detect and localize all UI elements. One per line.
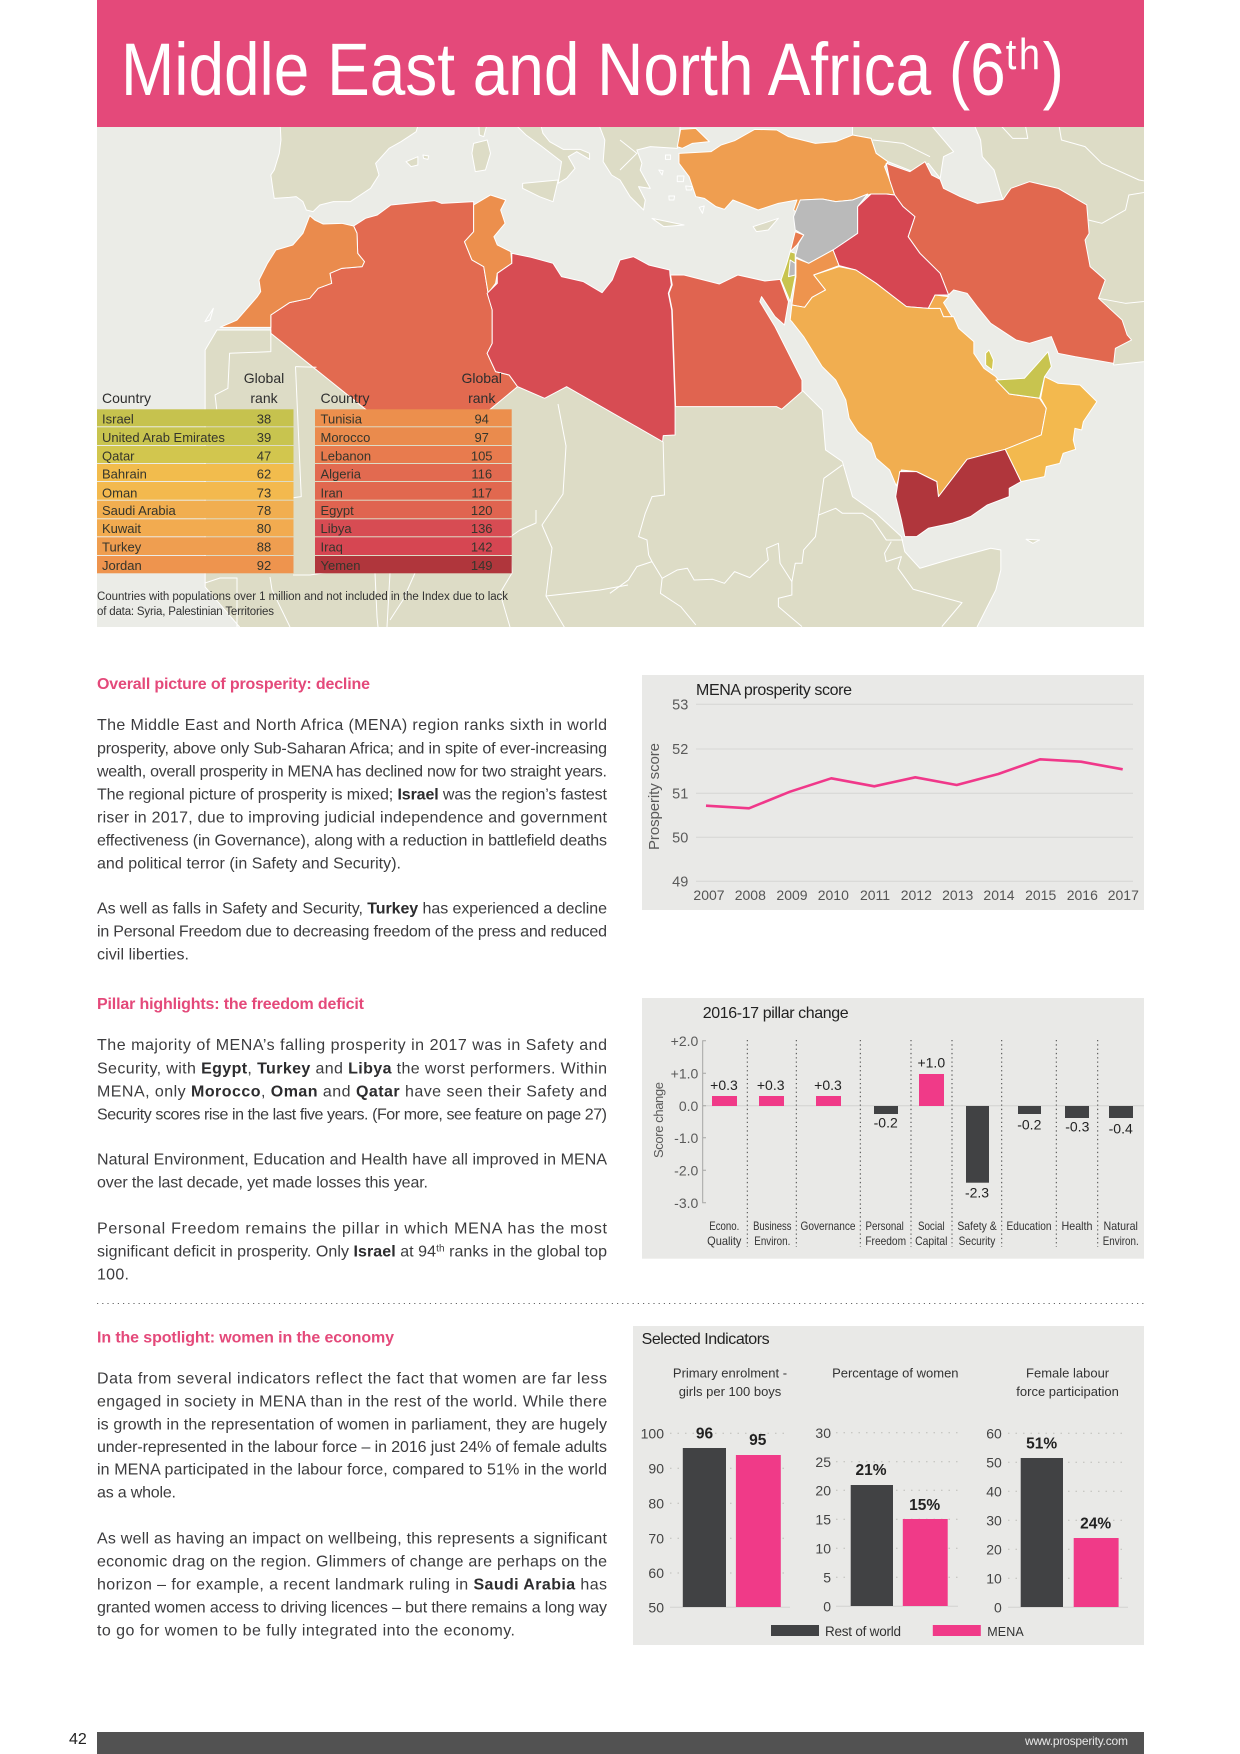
- chart: percentage of women: 0: [823, 1598, 831, 1614]
- table: countries ranked 94 to 149: Morocco: [320, 430, 370, 445]
- category labels: Health: [1062, 1219, 1092, 1233]
- axis title: Score change: [651, 1082, 666, 1158]
- axis labels: -1.0: [674, 1130, 699, 1146]
- category labels: Quality: [707, 1234, 741, 1248]
- chart: percentage of women: 10: [815, 1540, 831, 1556]
- country: Oman: [1005, 377, 1097, 482]
- country: Kuwait: [928, 295, 952, 317]
- text block: pillar highlights: ranks in the global top: [445, 1243, 607, 1260]
- country: Tunisia: [465, 195, 512, 293]
- text block: pillar highlights: The majority of MENA’s falling prosperity in 2017 was in Safety and: [97, 1037, 607, 1054]
- chart: female labour force participation: 60: [986, 1426, 1002, 1442]
- table: countries ranked 94 to 149: [315, 370, 512, 573]
- text block: overall picture: [96, 717, 608, 963]
- western map group: Iberia, Italy, Maghreb: [205, 120, 590, 413]
- table: countries ranked 38 to 92: Global: [244, 370, 284, 386]
- table: countries ranked 38 to 92: 88: [257, 540, 271, 555]
- text block: overall picture: The Middle East and North Africa (MENA) region ranks sixth in world: [97, 717, 607, 734]
- x axis years: 2009: [776, 887, 808, 903]
- footer bar: www.prosperity.com: [1024, 1734, 1128, 1748]
- x axis years: 2014: [983, 887, 1015, 903]
- land: Africa: [205, 330, 1001, 653]
- axis labels: -3.0: [674, 1195, 699, 1211]
- x axis years: 2008: [735, 887, 766, 903]
- y axis labels: 49: [672, 874, 688, 890]
- Palestinian Territories: [788, 260, 795, 277]
- chart: percentage of women: Percentage of women: [832, 1365, 959, 1380]
- chart: female labour force participation: [986, 1365, 1128, 1616]
- x axis years: 2012: [901, 887, 932, 903]
- table: countries ranked 94 to 149: 142: [471, 540, 493, 555]
- axis labels: 0.0: [679, 1098, 699, 1114]
- table: countries ranked 38 to 92: Bahrain: [102, 466, 147, 481]
- text block: overall picture: As well as falls in Safety and Security, Turkey has experienced a decline: [97, 900, 607, 917]
- heading: overall picture: Overall picture of prosperity: decline: [97, 676, 370, 693]
- map footnote: Countries with populations over 1 million and not included in the Index due to lack: [97, 591, 508, 603]
- chart: female labour force participation: 0: [994, 1600, 1002, 1616]
- category labels: Safety &: [957, 1219, 997, 1233]
- text block: pillar highlights: Security scores rise in the last five years. (For more, see feature on page 27): [97, 1106, 607, 1123]
- category labels: Governance: [800, 1219, 856, 1233]
- table: countries ranked 94 to 149: Tunisia: [320, 411, 363, 426]
- y axis labels: 52: [672, 742, 688, 758]
- text block: pillar highlights: Natural Environment, Education and Health have all improved in MENA: [97, 1151, 607, 1168]
- table: countries ranked 94 to 149: 116: [471, 466, 492, 481]
- text block: pillar highlights: over the last decade, yet made losses this year.: [97, 1174, 428, 1191]
- panel title: Selected Indicators: [642, 1331, 770, 1348]
- chart title: 2016-17 pillar change: [703, 1005, 849, 1022]
- y axis labels: [672, 698, 688, 890]
- table: countries ranked 38 to 92: Israel: [102, 411, 134, 426]
- country: Israel: [781, 252, 795, 302]
- land: Balkans and Caucasus: [600, 127, 680, 210]
- bar values: +0.3: [710, 1077, 738, 1093]
- eastern map group: land, Middle East countries: [597, 120, 1159, 627]
- text block: spotlight: granted women access to driving licences – but there remains a long way: [97, 1599, 607, 1616]
- land borders: [610, 120, 1159, 627]
- text block: overall picture: and political terror (in Safety and Security).: [97, 855, 401, 872]
- country: Libya: [487, 253, 675, 442]
- country: Turkey: [679, 129, 895, 213]
- chart: female labour force participation: 10: [986, 1570, 1002, 1586]
- text block: overall picture: prosperity, above only Sub-Saharan Africa; and in spite of ever-increasing: [97, 740, 607, 757]
- chart: female labour force participation: 24%: [1080, 1515, 1111, 1532]
- title banner: [97, 0, 1144, 127]
- panel: MENA prosperity score line chart: [642, 675, 1144, 910]
- category labels: Capital: [915, 1234, 947, 1248]
- title banner: ): [1043, 28, 1064, 111]
- chart: primary enrolment: 70: [648, 1530, 664, 1546]
- x axis years: 2010: [818, 887, 849, 903]
- table: countries ranked 38 to 92: Saudi Arabia: [102, 503, 176, 518]
- table: countries ranked 38 to 92: 38: [257, 411, 271, 426]
- table: countries ranked 38 to 92: Oman: [102, 485, 137, 500]
- chart: primary enrolment: 60: [648, 1565, 664, 1581]
- chart: percentage of women: 5: [823, 1570, 831, 1586]
- chart: primary enrolment: 90: [648, 1460, 664, 1476]
- bar values: +0.3: [814, 1077, 842, 1093]
- text block: overall picture: effectiveness (in Governance), along with a reduction in battlefield deaths: [97, 832, 607, 849]
- category labels: Personal: [866, 1219, 904, 1233]
- bar values: -0.2: [1017, 1116, 1042, 1132]
- chart: percentage of women: 20: [815, 1482, 831, 1498]
- table: countries ranked 38 to 92: 92: [257, 558, 271, 573]
- text block: overall picture: wealth, overall prosperity in MENA has declined now for two straight years.: [96, 763, 607, 780]
- text block: spotlight: horizon – for example, a recent landmark ruling in Saudi Arabia has: [97, 1576, 607, 1593]
- bar values: -2.3: [965, 1184, 989, 1200]
- text block: spotlight: economic drag on the region. Glimmers of change are perhaps on the: [97, 1553, 607, 1570]
- category labels: Environ.: [754, 1234, 790, 1248]
- map footnote: [97, 591, 508, 618]
- country: Saudi Arabia: [790, 267, 1046, 497]
- category labels: Environ.: [1103, 1234, 1139, 1248]
- y axis labels: 53: [672, 698, 688, 714]
- chart: female labour force participation: force participation: [1016, 1384, 1119, 1399]
- category labels: Security: [959, 1234, 995, 1248]
- text block: spotlight: under-represented in the labour force – in 2016 just 24% of female adults: [97, 1439, 607, 1456]
- table: countries ranked 94 to 149: 149: [471, 558, 493, 573]
- axis labels: +1.0: [671, 1066, 699, 1082]
- table: countries ranked 94 to 149: Iran: [320, 485, 343, 500]
- x axis years: 2017: [1108, 887, 1139, 903]
- text block: overall picture: in Personal Freedom due to decreasing freedom of the press and reduced: [97, 923, 607, 940]
- text block: spotlight: [97, 1370, 608, 1639]
- footer bar: [97, 1732, 1144, 1754]
- chart: female labour force participation: Female labour: [1026, 1365, 1110, 1380]
- x axis years: 2011: [860, 887, 890, 903]
- text block: pillar highlights: significant deficit in prosperity. Only Israel at 94: [97, 1243, 436, 1260]
- panel: selected indicators: [633, 1326, 1144, 1645]
- table: countries ranked 38 to 92: 62: [257, 466, 271, 481]
- table: countries ranked 38 to 92: Country: [102, 390, 151, 406]
- legend: Rest of world: [825, 1624, 901, 1639]
- legend: MENA: [987, 1625, 1024, 1639]
- chart: female labour force participation: 51%: [1026, 1435, 1057, 1452]
- text block: spotlight: to go for women to be fully integrated into the economy.: [97, 1622, 515, 1639]
- chart title: MENA prosperity score: [696, 682, 852, 699]
- table: countries ranked 38 to 92: 80: [257, 521, 271, 536]
- country: UAE: [996, 352, 1051, 398]
- chart: primary enrolment: 95: [749, 1432, 767, 1449]
- chart: primary enrolment: 50: [648, 1600, 664, 1616]
- chart: female labour force participation: 50: [986, 1454, 1002, 1470]
- table: countries ranked 94 to 149: Yemen: [320, 558, 360, 573]
- table: countries ranked 94 to 149: 120: [471, 503, 493, 518]
- category labels: Education: [1006, 1219, 1052, 1233]
- chart: female labour force participation: 20: [986, 1542, 1002, 1558]
- map footnote: of data: Syria, Palestinian Territories: [97, 606, 274, 618]
- table: countries ranked 94 to 149: Egypt: [320, 503, 354, 518]
- heading: pillar highlights: Pillar highlights: the freedom deficit: [97, 996, 365, 1013]
- chart: female labour force participation: 40: [986, 1484, 1002, 1500]
- text block: overall picture: civil liberties.: [97, 946, 189, 963]
- table: countries ranked 38 to 92: United Arab Emirates: [102, 430, 225, 445]
- category labels: [707, 1219, 1139, 1248]
- chart: percentage of women: 25: [815, 1454, 831, 1470]
- table: countries ranked 94 to 149: Country: [320, 390, 370, 406]
- heading: spotlight: In the spotlight: women in the economy: [97, 1329, 394, 1346]
- table: countries ranked 38 to 92: 39: [257, 430, 271, 445]
- x axis years: [693, 887, 1139, 903]
- x axis years: 2016: [1067, 887, 1098, 903]
- table: countries ranked 94 to 149: rank: [468, 390, 496, 406]
- page number: 42: [69, 1731, 87, 1748]
- y axis labels: 50: [672, 830, 688, 846]
- chart: percentage of women: 15%: [909, 1497, 940, 1514]
- category labels: Freedom: [865, 1234, 906, 1248]
- chart: primary enrolment: Primary enrolment -: [673, 1365, 787, 1380]
- chart: female labour force participation: 30: [986, 1512, 1002, 1528]
- text block: spotlight: in MENA participated in the labour force, compared to 51% in the world: [97, 1461, 607, 1478]
- country: Iraq: [833, 194, 949, 308]
- west Africa borders: [215, 330, 316, 498]
- title banner: Middle East and North Africa (6: [121, 28, 1006, 111]
- map panel: [97, 120, 1159, 653]
- bar values: +1.0: [917, 1054, 945, 1070]
- table: countries ranked 38 to 92: rank: [250, 390, 279, 406]
- category labels: Econo.: [709, 1219, 739, 1233]
- chart: primary enrolment: [641, 1365, 790, 1616]
- table: countries ranked 38 to 92: Turkey: [102, 540, 142, 555]
- chart: percentage of women: 30: [815, 1425, 831, 1441]
- chart: percentage of women: 15: [815, 1512, 831, 1528]
- bar values: [710, 1054, 1133, 1200]
- country: Egypt: [669, 275, 802, 409]
- country: Morocco: [220, 216, 364, 327]
- x axis years: 2015: [1025, 887, 1056, 903]
- title banner: th: [1006, 29, 1043, 79]
- table: countries ranked 94 to 149: 94: [474, 411, 489, 426]
- table: countries ranked 38 to 92: [97, 370, 294, 573]
- score line: [706, 759, 1123, 808]
- country: Yemen: [896, 449, 1021, 537]
- text block: pillar highlights: th: [436, 1243, 445, 1254]
- bar values: -0.4: [1109, 1121, 1133, 1137]
- bar values: +0.3: [757, 1077, 785, 1093]
- category labels: Social: [918, 1219, 945, 1233]
- chart: primary enrolment: 100: [641, 1426, 664, 1442]
- country: Lebanon: [790, 232, 804, 252]
- country: Jordan: [792, 250, 839, 307]
- chart: percentage of women: [815, 1365, 959, 1614]
- text block: pillar highlights: Personal Freedom remains the pillar in which MENA has the most: [97, 1220, 608, 1237]
- table: countries ranked 38 to 92: 73: [257, 485, 271, 500]
- text block: pillar highlights: Security, with Egypt, Turkey and Libya the worst performers. Within: [97, 1060, 607, 1077]
- chart: primary enrolment: girls per 100 boys: [679, 1384, 782, 1399]
- legend: [771, 1624, 1024, 1639]
- table: countries ranked 94 to 149: Iraq: [320, 540, 343, 555]
- chart: percentage of women: 21%: [855, 1462, 887, 1479]
- text block: spotlight: Data from several indicators reflect the fact that women are far less: [97, 1370, 607, 1387]
- y axis labels: 51: [672, 786, 688, 802]
- table: countries ranked 38 to 92: 78: [257, 503, 271, 518]
- country: Syria: [794, 194, 868, 263]
- table: countries ranked 94 to 149: Global: [461, 370, 502, 386]
- country: Iran: [886, 162, 1132, 363]
- x axis years: 2013: [942, 887, 973, 903]
- text block: spotlight: engaged in society in MENA than in the rest of the world. While there: [97, 1393, 607, 1410]
- text block: overall picture: The regional picture of prosperity is mixed; Israel was the region’s fastest: [97, 786, 608, 803]
- country: Qatar: [986, 350, 993, 370]
- table: countries ranked 94 to 149: 117: [471, 485, 492, 500]
- panel: 2016-17 pillar change bar chart: [642, 998, 1144, 1259]
- text block: spotlight: is growth in the representation of women in parliament, they are hugely: [97, 1416, 607, 1433]
- category labels: Natural: [1104, 1219, 1138, 1233]
- bars: [712, 1074, 1133, 1183]
- chart: primary enrolment: 80: [648, 1496, 664, 1512]
- axis labels: -2.0: [674, 1162, 699, 1178]
- table: countries ranked 38 to 92: Kuwait: [102, 521, 141, 536]
- y axis title: Prosperity score: [646, 743, 663, 850]
- x axis years: 2007: [693, 887, 725, 903]
- chart: primary enrolment: 96: [696, 1425, 713, 1442]
- table: countries ranked 94 to 149: Algeria: [320, 466, 362, 481]
- text block: overall picture: riser in 2017, due to improving judicial independence and government: [97, 809, 608, 826]
- table: countries ranked 94 to 149: Lebanon: [320, 448, 371, 463]
- table: countries ranked 94 to 149: 97: [474, 430, 489, 445]
- axis labels: [671, 1033, 699, 1211]
- category labels: Business: [753, 1219, 791, 1233]
- axis labels: +2.0: [671, 1033, 699, 1049]
- table: countries ranked 94 to 149: 136: [471, 521, 493, 536]
- text block: pillar highlights: MENA, only Morocco, Oman and Qatar have seen their Safety and: [97, 1083, 607, 1100]
- table: countries ranked 38 to 92: Qatar: [102, 448, 135, 463]
- bar values: -0.2: [874, 1115, 898, 1131]
- text block: pillar highlights: 100.: [97, 1266, 129, 1283]
- text block: spotlight: as a whole.: [97, 1484, 176, 1501]
- text block: pillar highlights: [97, 1037, 608, 1283]
- table: countries ranked 38 to 92: Jordan: [102, 558, 142, 573]
- axis and zero line: [703, 1041, 1144, 1203]
- table: countries ranked 94 to 149: Libya: [320, 521, 352, 536]
- bar values: -0.3: [1065, 1119, 1090, 1135]
- table: countries ranked 94 to 149: 105: [471, 448, 493, 463]
- text block: spotlight: As well as having an impact on wellbeing, this represents a significant: [97, 1530, 608, 1547]
- table: countries ranked 38 to 92: 47: [257, 448, 271, 463]
- country: Algeria: [271, 201, 518, 413]
